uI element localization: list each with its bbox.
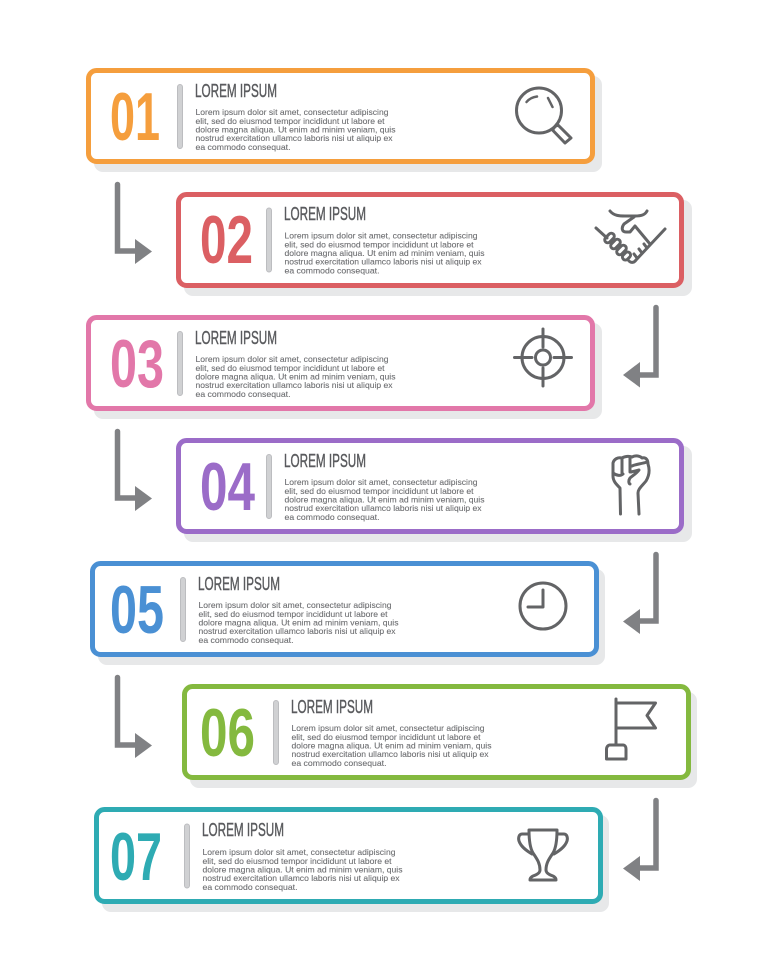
heading: LOREM IPSUM <box>195 327 277 348</box>
divider <box>178 332 182 396</box>
icon: handshake <box>596 211 665 262</box>
text block: ea commodo consequat. <box>292 758 386 768</box>
number 05: 05 <box>110 572 164 648</box>
number 01: 01 <box>110 79 160 155</box>
icon: clock <box>520 583 566 629</box>
arrow: 04 to 05 <box>623 554 656 634</box>
text block: nostrud exercitation ullamco laboris nisi ut aliquip ex <box>284 256 482 266</box>
panel: step 06 <box>184 686 697 788</box>
arrow: 05 to 06 <box>118 678 152 758</box>
text block: nostrud exercitation ullamco laboris nisi ut aliquip ex <box>196 133 393 143</box>
divider <box>180 578 186 642</box>
text block: Lorem ipsum dolor sit amet, consectetur adipiscing <box>284 477 478 487</box>
text block: Lorem ipsum dolor sit amet, consectetur adipiscing <box>196 354 389 364</box>
text block: Lorem ipsum dolor sit amet, consectetur adipiscing <box>198 600 392 610</box>
heading: LOREM IPSUM <box>198 573 280 594</box>
number 07: 07 <box>110 819 162 895</box>
text block: ea commodo consequat. <box>196 142 290 152</box>
text block <box>196 354 396 399</box>
heading: LOREM IPSUM <box>284 450 366 471</box>
divider <box>184 824 190 888</box>
divider <box>274 700 278 764</box>
text block <box>198 600 398 645</box>
panel: step 07 <box>96 810 609 912</box>
text block: elit, sed do eiusmod tempor incididunt ut labore et <box>196 363 385 373</box>
text block: Lorem ipsum dolor sit amet, consectetur adipiscing <box>196 107 389 117</box>
text block: nostrud exercitation ullamco laboris nisi ut aliquip ex <box>196 380 393 390</box>
text block: nostrud exercitation ullamco laboris nisi ut aliquip ex <box>284 503 482 513</box>
text block: elit, sed do eiusmod tempor incididunt ut labore et <box>196 116 385 126</box>
text block: nostrud exercitation ullamco laboris nisi ut aliquip ex <box>198 626 396 636</box>
text block: ea commodo consequat. <box>284 512 380 522</box>
panel: step 01 <box>88 70 602 172</box>
text block: Lorem ipsum dolor sit amet, consectetur adipiscing <box>292 723 485 733</box>
text block: dolore magna aliqua. Ut enim ad minim veniam, quis <box>196 372 396 382</box>
text block: dolore magna aliqua. Ut enim ad minim veniam, quis <box>284 494 484 504</box>
heading: LOREM IPSUM <box>195 80 277 101</box>
number 02: 02 <box>200 202 253 278</box>
arrow: 01 to 02 <box>118 184 152 264</box>
text block: ea commodo consequat. <box>196 389 290 399</box>
text block: dolore magna aliqua. Ut enim ad minim veniam, quis <box>196 124 396 134</box>
icon: magnifying glass <box>516 88 571 143</box>
text block: nostrud exercitation ullamco laboris nisi ut aliquip ex <box>202 873 400 883</box>
number 06: 06 <box>200 695 255 771</box>
panel: step 05 <box>92 564 605 665</box>
text block: dolore magna aliqua. Ut enim ad minim veniam, quis <box>198 618 398 628</box>
divider <box>266 454 272 518</box>
heading: LOREM IPSUM <box>291 696 373 717</box>
panel: step 02 <box>178 194 692 296</box>
text block: elit, sed do eiusmod tempor incididunt ut labore et <box>284 240 474 250</box>
icon: raised fist <box>613 456 649 514</box>
heading: LOREM IPSUM <box>284 203 366 224</box>
text block: ea commodo consequat. <box>284 266 380 276</box>
text block: dolore magna aliqua. Ut enim ad minim veniam, quis <box>202 864 402 874</box>
text block <box>284 230 484 276</box>
text block <box>202 847 402 892</box>
arrow: 06 to 07 <box>623 800 656 881</box>
text block <box>196 107 396 152</box>
number 03: 03 <box>110 326 164 402</box>
text block: nostrud exercitation ullamco laboris nisi ut aliquip ex <box>292 749 489 759</box>
text block: ea commodo consequat. <box>202 882 298 892</box>
text block: elit, sed do eiusmod tempor incididunt ut labore et <box>202 856 392 866</box>
text block: Lorem ipsum dolor sit amet, consectetur adipiscing <box>202 847 396 857</box>
text block: elit, sed do eiusmod tempor incididunt ut labore et <box>198 609 388 619</box>
heading: LOREM IPSUM <box>202 819 284 840</box>
panel: step 03 <box>88 318 602 419</box>
text block: ea commodo consequat. <box>198 635 294 645</box>
text block: Lorem ipsum dolor sit amet, consectetur adipiscing <box>284 230 478 240</box>
number 04: 04 <box>200 449 255 525</box>
divider <box>178 84 182 148</box>
icon: flag <box>606 699 656 759</box>
text block: elit, sed do eiusmod tempor incididunt ut labore et <box>292 732 481 742</box>
icon: target <box>514 329 572 386</box>
arrow: 02 to 03 <box>623 308 656 388</box>
icon: trophy <box>519 830 567 880</box>
text block: elit, sed do eiusmod tempor incididunt ut labore et <box>284 486 474 496</box>
divider <box>266 208 272 272</box>
text block: dolore magna aliqua. Ut enim ad minim veniam, quis <box>284 248 484 258</box>
text block <box>292 723 492 768</box>
panel: step 04 <box>178 440 692 542</box>
text block <box>284 477 484 522</box>
text block: dolore magna aliqua. Ut enim ad minim veniam, quis <box>292 740 492 750</box>
arrow: 03 to 04 <box>118 432 152 511</box>
